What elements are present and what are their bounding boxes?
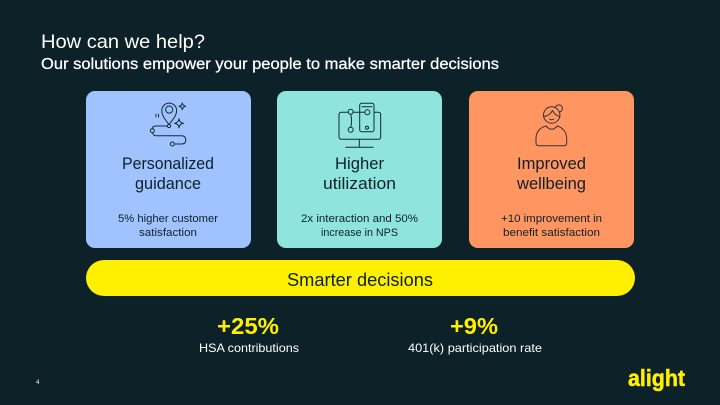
heading: higher utilization: Higher (335, 155, 385, 173)
stat: 401(k) participation rate: 401(k) participation rate (408, 341, 542, 355)
page number: 4 (36, 380, 40, 386)
heading: personalized guidance (122, 155, 214, 193)
stat: 401(k) participation rate (408, 313, 542, 355)
panel: improved wellbeing (469, 91, 634, 248)
heading: higher utilization: utilization (323, 175, 396, 193)
text: benefit satisfaction stat: benefit satisfaction (503, 227, 600, 239)
logo: alight: alight (628, 365, 685, 391)
heading: personalized guidance: Personalized (122, 155, 214, 173)
stat: HSA contributions: +25% (217, 313, 279, 339)
text: benefit satisfaction stat: +10 improvement in (501, 213, 602, 225)
banner: smarter decisions: Smarter decisions (287, 269, 433, 290)
text: benefit satisfaction stat (501, 213, 602, 239)
icon: monitor and phone (339, 103, 381, 147)
heading: personalized guidance: guidance (135, 175, 201, 193)
text: customer satisfaction stat: satisfaction (139, 227, 197, 239)
heading: improved wellbeing: wellbeing (516, 175, 586, 193)
text: interaction and NPS stat: 2x interaction and 50% (301, 213, 418, 225)
text: customer satisfaction stat: 5% higher customer (118, 213, 218, 225)
stat: HSA contributions (199, 313, 299, 355)
heading: higher utilization (323, 155, 396, 193)
text: interaction and NPS stat: increase in NPS (321, 227, 398, 239)
title: How can we help? (41, 31, 205, 53)
panel: personalized guidance (86, 91, 251, 248)
text: interaction and NPS stat (301, 213, 418, 239)
panel: higher utilization (277, 91, 442, 248)
banner: smarter decisions (86, 260, 635, 296)
stat: 401(k) participation rate: +9% (450, 313, 498, 339)
stat: HSA contributions: HSA contributions (199, 341, 299, 355)
text: customer satisfaction stat (118, 213, 218, 239)
heading: improved wellbeing (516, 155, 586, 193)
icon: map pin with route (150, 103, 186, 146)
icon: person with hair bun (536, 105, 567, 146)
heading: improved wellbeing: Improved (517, 155, 586, 173)
subtitle: Our solutions empower your people to make smarter decisions (41, 56, 499, 73)
